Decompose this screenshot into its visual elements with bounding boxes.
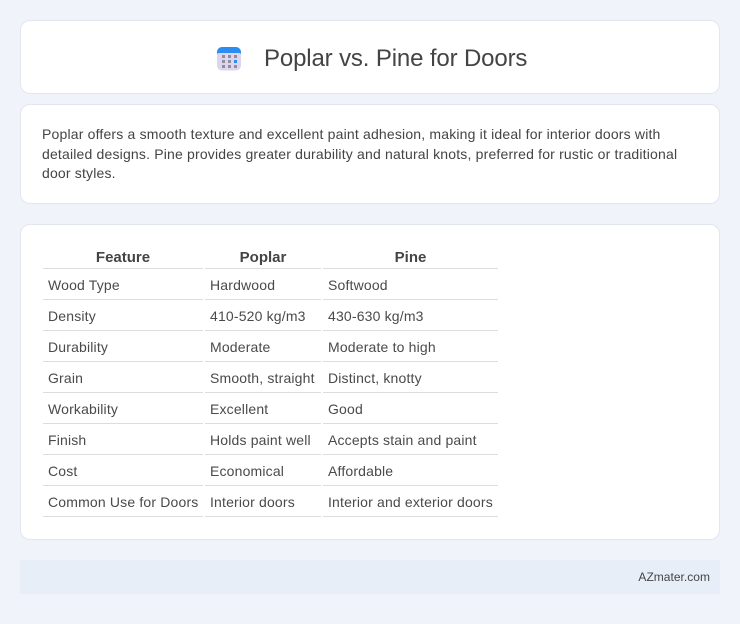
table card bbox=[20, 224, 720, 540]
comparison table: Durability bbox=[48, 338, 108, 354]
comparison table: Holds paint well bbox=[210, 432, 311, 448]
comparison table: Affordable bbox=[328, 462, 393, 478]
comparison table: Pine bbox=[395, 249, 426, 266]
comparison table: 410-520 kg/m3 bbox=[210, 308, 306, 324]
intro text bbox=[42, 126, 677, 181]
comparison table: Feature bbox=[96, 249, 150, 266]
comparison table: Workability bbox=[48, 400, 118, 416]
footer: AZmater.com bbox=[638, 570, 710, 584]
intro text: door styles. bbox=[42, 165, 116, 181]
comparison table: Density bbox=[48, 308, 96, 324]
comparison table: Smooth, straight bbox=[210, 370, 315, 386]
comparison table: Moderate bbox=[210, 338, 271, 354]
comparison table: Grain bbox=[48, 370, 83, 386]
title card bbox=[20, 20, 720, 94]
comparison table: Hardwood bbox=[210, 276, 275, 292]
comparison table: Excellent bbox=[210, 400, 268, 416]
comparison table: Interior doors bbox=[210, 494, 295, 510]
comparison table: Distinct, knotty bbox=[328, 370, 422, 386]
title: Poplar vs. Pine for Doors bbox=[264, 45, 527, 72]
comparison table: Common Use for Doors bbox=[48, 494, 198, 510]
footer bbox=[20, 560, 720, 594]
intro text: Poplar offers a smooth texture and excellent paint adhesion, making it ideal for interior doors with bbox=[42, 126, 661, 142]
comparison table bbox=[43, 249, 498, 517]
comparison table: Wood Type bbox=[48, 276, 120, 292]
comparison table: Accepts stain and paint bbox=[328, 432, 477, 448]
comparison table: Good bbox=[328, 400, 363, 416]
comparison table: Interior and exterior doors bbox=[328, 494, 493, 510]
intro text: detailed designs. Pine provides greater durability and natural knots, preferred for rustic or traditional bbox=[42, 146, 677, 162]
comparison table: Cost bbox=[48, 462, 77, 478]
comparison table: 430-630 kg/m3 bbox=[328, 308, 424, 324]
comparison table: Economical bbox=[210, 462, 284, 478]
comparison table: Moderate to high bbox=[328, 338, 436, 354]
icon: calendar bbox=[217, 47, 241, 70]
intro card bbox=[20, 104, 720, 204]
comparison table: Finish bbox=[48, 432, 86, 448]
comparison table: Poplar bbox=[240, 249, 286, 266]
comparison table: Softwood bbox=[328, 276, 388, 292]
